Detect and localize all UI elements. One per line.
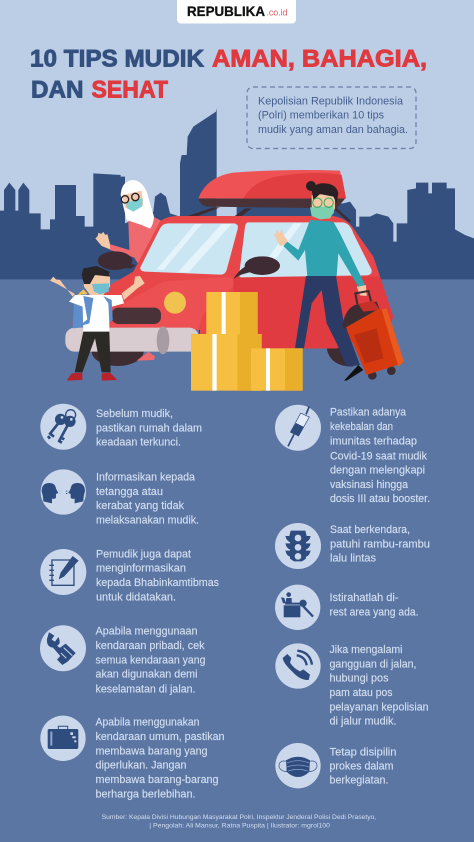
text: tip 9: pelayanan kepolisian bbox=[330, 701, 428, 713]
text: tip 4: semua kendaraan yang bbox=[96, 654, 206, 666]
icon: telephone bbox=[275, 643, 321, 689]
text: tip 5: Apabila menggunakan bbox=[96, 716, 200, 728]
text: tip 9: Jika mengalami bbox=[330, 644, 402, 656]
text: tip 2 bbox=[96, 472, 199, 527]
icon: notebook and pen bbox=[40, 549, 86, 595]
icon: two faces bbox=[41, 469, 86, 515]
text: tip 3 bbox=[96, 549, 219, 604]
text: tip 4: akan digunakan demi bbox=[96, 669, 198, 681]
title: AMAN, BAHAGIA, bbox=[212, 46, 427, 73]
title bbox=[30, 46, 427, 103]
text: tip 9 bbox=[330, 644, 428, 728]
icon: syringe bbox=[275, 405, 321, 451]
callout: intro: Kepolisian Republik Indonesia bbox=[258, 95, 404, 107]
text: tip 6: imunitas terhadap bbox=[330, 436, 417, 448]
text: tip 6: Covid-19 saat mudik bbox=[330, 450, 427, 462]
city skyline bbox=[0, 108, 474, 279]
text: tip 3: menginformasikan bbox=[96, 563, 186, 575]
source credits: Sumber: Kepala Divisi Hubungan Masyarakat Polri, Inspektur Jenderal Polisi Dedi Prasetyo, bbox=[102, 814, 376, 821]
text: tip 3: Pemudik juga dapat bbox=[96, 549, 192, 561]
text: tip 6: Pastikan adanya bbox=[330, 407, 407, 419]
callout: intro: mudik yang aman dan bahagia. bbox=[258, 124, 408, 136]
text: tip 5: diperlukan. Jangan bbox=[96, 760, 186, 772]
title: SEHAT bbox=[92, 76, 168, 103]
text: tip 10: berkegiatan. bbox=[330, 775, 388, 787]
source credits bbox=[102, 814, 376, 829]
logo: Republika: REPUBLIKA bbox=[187, 3, 265, 19]
text: tip 2: melaksanakan mudik. bbox=[96, 515, 199, 527]
title: DAN bbox=[31, 76, 84, 103]
icon: face mask bbox=[275, 743, 321, 788]
text: tip 7 bbox=[330, 524, 430, 564]
text: tip 2: tetangga atau bbox=[96, 486, 163, 498]
callout: intro: (Polri) memberikan 10 tips bbox=[258, 110, 384, 122]
text: tip 10: prokes dalam bbox=[330, 761, 394, 773]
tip 5: luggage bbox=[40, 716, 224, 800]
woman in hijab bbox=[95, 180, 163, 267]
text: tip 10 bbox=[330, 746, 396, 787]
text: tip 5: membawa barang-barang bbox=[96, 774, 218, 786]
tip 1: keys bbox=[40, 404, 202, 450]
text: tip 9: pam atau pos bbox=[330, 687, 393, 699]
text: tip 1: Sebelum mudik, bbox=[96, 408, 173, 420]
text: tip 8: rest area yang ada. bbox=[330, 606, 418, 618]
text: tip 5: berharga berlebihan. bbox=[96, 788, 196, 800]
text: tip 5: membawa barang yang bbox=[96, 745, 208, 757]
text: tip 9: hubungi pos bbox=[330, 673, 389, 685]
text: tip 6: dengan melengkapi bbox=[330, 465, 425, 477]
man with suitcase bbox=[273, 181, 367, 381]
text: tip 6: kekebalan dan bbox=[330, 421, 393, 433]
text: tip 8 bbox=[330, 592, 418, 618]
text: tip 10: Tetap disipilin bbox=[330, 746, 396, 758]
source credits: | Pengolah: Ali Mansur, Ratna Puspita | Ilustrator: mgrol100 bbox=[149, 822, 330, 829]
callout: intro bbox=[247, 87, 416, 148]
logo: Republika: .co.id bbox=[266, 8, 288, 18]
text: tip 9: gangguan di jalan, bbox=[330, 658, 416, 670]
tip 3: notebook bbox=[40, 549, 219, 604]
suitcase bbox=[342, 291, 404, 380]
text: tip 6: dosis III atau booster. bbox=[330, 493, 430, 505]
text: tip 5: kendaraan umum, pastikan bbox=[96, 731, 224, 743]
illustration: family, car, skyline bbox=[0, 108, 474, 391]
tip 4: tools bbox=[40, 625, 205, 695]
text: tip 3: kepada Bhabinkamtibmas bbox=[96, 577, 219, 589]
text: tip 2: kerabat yang tidak bbox=[96, 500, 184, 512]
car body bbox=[65, 216, 393, 367]
text: tip 7: Saat berkendara, bbox=[330, 524, 410, 536]
icon: briefcase bbox=[40, 716, 86, 761]
text: tip 4: Apabila menggunaan bbox=[96, 626, 198, 638]
text: tip 4: kendaraan pribadi, cek bbox=[96, 640, 205, 652]
logo: Republika bbox=[177, 0, 296, 24]
tip 6: vaccine bbox=[275, 405, 430, 505]
tip 7: traffic light bbox=[275, 523, 430, 569]
icon: rest area desk bbox=[275, 585, 320, 630]
tip 10: mask bbox=[275, 743, 396, 788]
text: tip 6: vaksinasi hingga bbox=[330, 479, 409, 491]
text: tip 4 bbox=[96, 626, 206, 695]
icon: traffic light bbox=[275, 523, 321, 569]
text: tip 1 bbox=[96, 408, 202, 449]
text: tip 2: Informasikan kepada bbox=[96, 472, 196, 484]
boy with backpack bbox=[50, 266, 145, 381]
text: tip 8: Istirahatlah di- bbox=[330, 592, 399, 604]
icon: keys bbox=[40, 404, 86, 450]
roof box bbox=[183, 170, 350, 222]
text: tip 4: keselamatan di jalan. bbox=[96, 683, 196, 695]
text: tip 1: keadaan terkunci. bbox=[96, 437, 181, 449]
text: tip 3: untuk didatakan. bbox=[96, 592, 176, 604]
text: tip 5 bbox=[96, 716, 224, 800]
text: tip 1: pastikan rumah dalam bbox=[96, 423, 202, 435]
text: tip 7: patuhi rambu-rambu bbox=[330, 538, 430, 550]
text: tip 9: di jalur mudik. bbox=[330, 716, 396, 728]
tip 8: rest area bbox=[275, 585, 418, 630]
tip 9: phone bbox=[275, 643, 428, 728]
text: tip 6 bbox=[330, 407, 430, 505]
cardboard boxes bbox=[191, 292, 303, 391]
title: 10 TIPS MUDIK bbox=[30, 46, 204, 73]
text: tip 7: lalu lintas bbox=[330, 552, 376, 564]
tip 2: neighbours bbox=[41, 469, 199, 527]
icon: wrench and screwdriver bbox=[40, 625, 86, 671]
